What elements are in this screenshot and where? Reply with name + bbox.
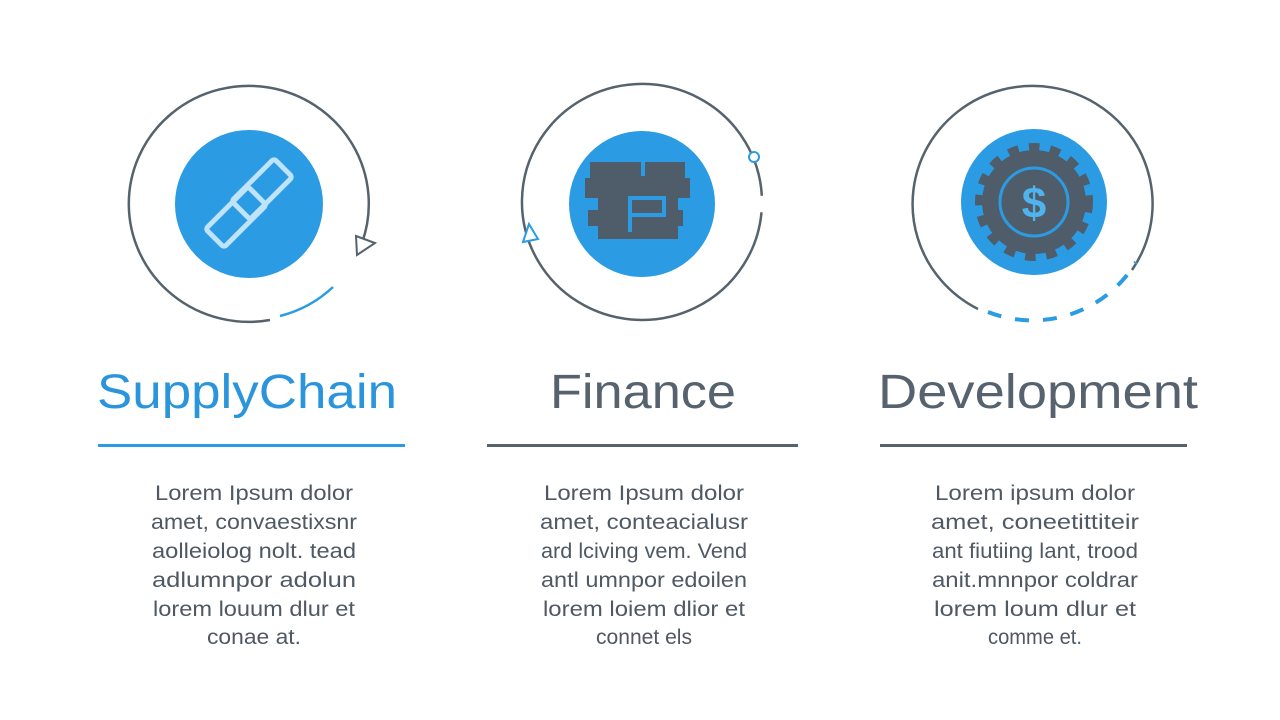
text block: development: Lorem ipsum dolor bbox=[935, 482, 1135, 505]
text block: supply chain: adlumnpor adolun bbox=[152, 569, 356, 592]
heading: supply chain: SupplyChain bbox=[97, 366, 397, 419]
text block: supply chain bbox=[151, 482, 357, 649]
text block: finance bbox=[540, 482, 748, 649]
text block: development: comme et. bbox=[988, 626, 1082, 649]
text block: finance: antl umnpor edoilen bbox=[541, 569, 747, 592]
panel: finance bbox=[487, 84, 798, 649]
icon: gear dollar: $ bbox=[1022, 179, 1046, 228]
text block: finance: ard lciving vem. Vend bbox=[541, 540, 747, 563]
heading: development: Development bbox=[878, 366, 1198, 419]
icon: finance bbox=[569, 131, 715, 277]
text block: development: amet, coneetittiteir bbox=[931, 511, 1139, 534]
panel: development bbox=[878, 86, 1198, 649]
icon: gear dollar bbox=[961, 129, 1107, 275]
ring: finance bbox=[522, 84, 762, 320]
text block: supply chain: conae at. bbox=[207, 626, 301, 649]
text block: finance: amet, conteacialusr bbox=[540, 511, 748, 534]
ring: development bbox=[913, 86, 1153, 320]
text block: supply chain: aolleiolog nolt. tead bbox=[152, 540, 356, 563]
text block: finance: lorem loiem dlior et bbox=[543, 598, 745, 621]
heading: finance: Finance bbox=[550, 366, 736, 419]
text block: development: anit.mnnpor coldrar bbox=[932, 569, 1138, 592]
icon: chain link bbox=[175, 130, 323, 278]
text block: development: lorem loum dlur et bbox=[934, 598, 1136, 621]
panel: supply chain bbox=[97, 86, 405, 649]
text block: supply chain: amet, convaestixsnr bbox=[151, 511, 357, 534]
text block: supply chain: lorem louum dlur et bbox=[153, 598, 355, 621]
ring: supply chain bbox=[129, 86, 375, 322]
text block: finance: connet els bbox=[596, 626, 692, 649]
text block: development: ant fiutiing lant, trood bbox=[932, 540, 1138, 563]
text block: supply chain: Lorem Ipsum dolor bbox=[155, 482, 353, 505]
text block: finance: Lorem Ipsum dolor bbox=[544, 482, 744, 505]
text block: development bbox=[931, 482, 1139, 649]
